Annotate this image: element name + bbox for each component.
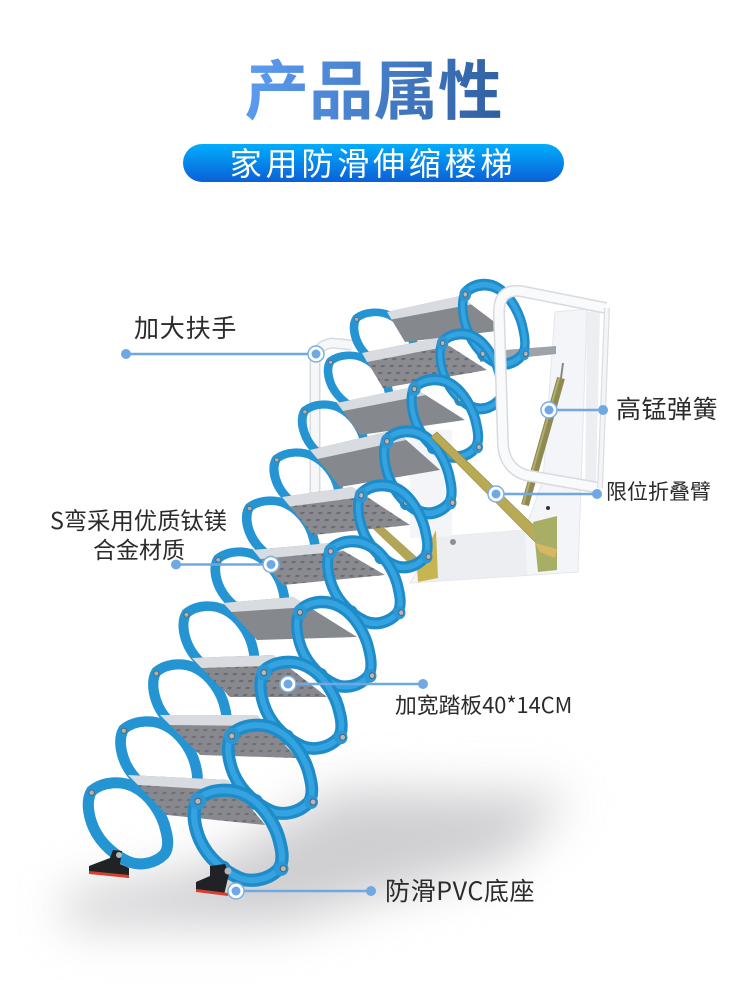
wall bracket	[410, 309, 600, 583]
spring	[523, 363, 563, 505]
callout: 加大扶手	[121, 309, 324, 362]
ladder	[88, 285, 529, 880]
step 9	[328, 334, 506, 412]
callout: S弯采用优质钛镁合金材质	[50, 502, 279, 572]
floor shadow	[60, 790, 570, 925]
callout: 加宽踏板40*14CM	[280, 676, 572, 720]
step 8	[302, 380, 483, 464]
gold bracket: left	[417, 530, 438, 582]
callout: 高锰弹簧	[541, 390, 718, 426]
callout: S弯采用优质钛镁合金材质: 合金材质	[93, 531, 185, 565]
callout: 限位折叠臂	[488, 476, 711, 506]
subtitle pill: 家用防滑伸缩楼梯	[230, 139, 516, 185]
left handrail	[315, 343, 352, 495]
rear foot	[89, 850, 129, 878]
step 6	[247, 485, 432, 567]
step 2	[121, 715, 318, 813]
callout: S弯采用优质钛镁合金材质: S弯采用优质钛镁	[50, 502, 227, 536]
front handrail	[499, 291, 607, 488]
title: 产品属性	[244, 39, 503, 133]
callout: 高锰弹簧: 高锰弹簧	[616, 390, 718, 426]
front foot	[196, 864, 232, 896]
callout: 加大扶手: 加大扶手	[134, 309, 237, 345]
step 3	[153, 655, 348, 749]
step 5	[215, 541, 406, 623]
step 7	[274, 430, 456, 513]
lower folding arm	[372, 524, 420, 568]
callout: 加宽踏板40*14CM: 加宽踏板40*14CM	[395, 689, 572, 720]
step 1	[88, 775, 288, 880]
callout: 限位折叠臂: 限位折叠臂	[606, 476, 711, 506]
step 4	[183, 597, 376, 687]
upper folding arm	[431, 432, 557, 572]
callout: 防滑PVC底座: 防滑PVC底座	[385, 872, 535, 908]
step 10	[354, 285, 530, 369]
callout: 防滑PVC底座	[228, 872, 535, 908]
